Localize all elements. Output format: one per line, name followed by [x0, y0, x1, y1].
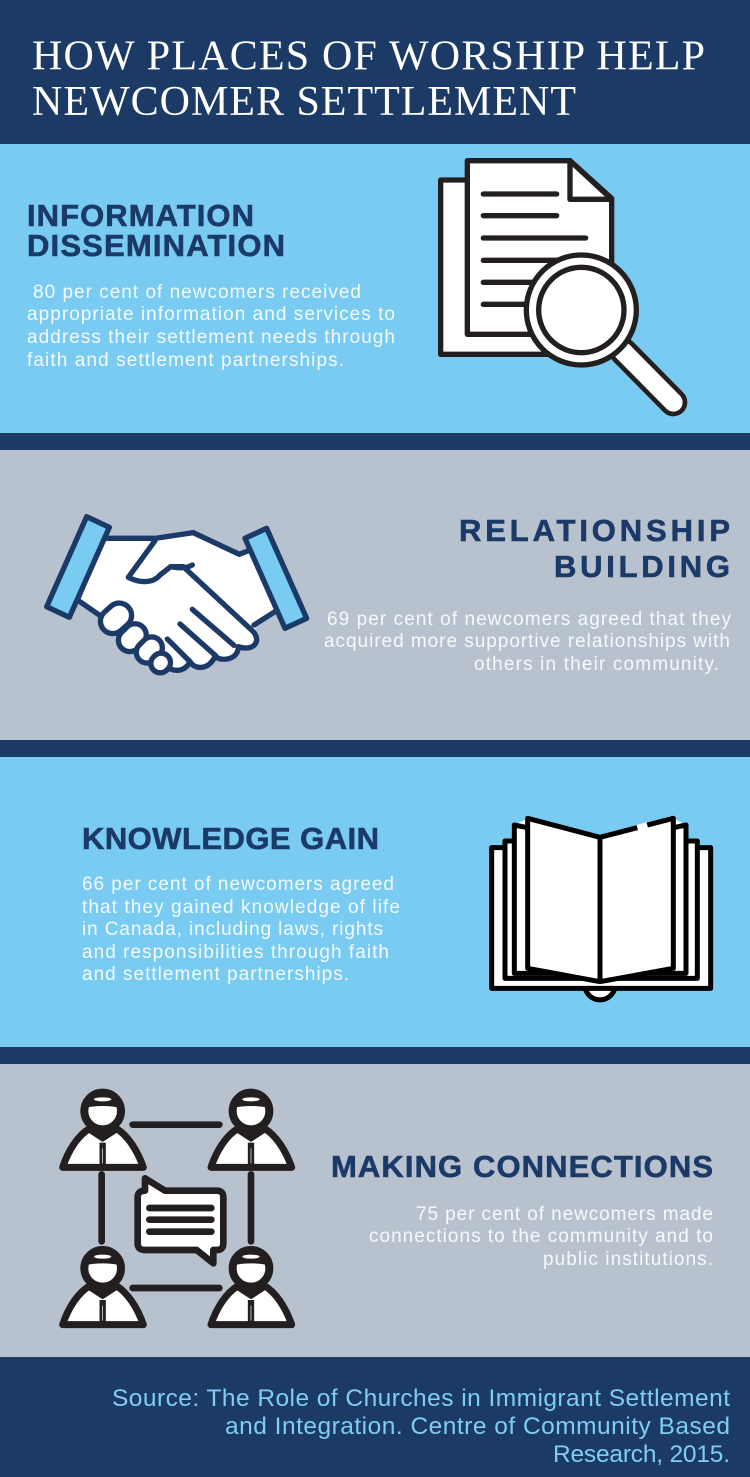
icon: connected people with speech bubble [63, 1093, 292, 1325]
text: source citation [112, 1385, 730, 1468]
text: source citation: and Integration. Centre of Community Based [225, 1413, 730, 1440]
text: relationship building: others in their community. [474, 654, 719, 675]
text: source citation: Research, 2015. [553, 1441, 730, 1468]
icon: open book [492, 818, 711, 1000]
panel: knowledge gain [0, 757, 750, 1047]
text: source citation: Source: The Role of Churches in Immigrant Settlement [112, 1385, 730, 1412]
heading: relationship building: RELATIONSHIP [459, 513, 730, 548]
text: making connections [369, 1204, 713, 1270]
heading: relationship building: BUILDING [554, 549, 730, 584]
heading: information dissemination: INFORMATION [27, 198, 254, 233]
text: information dissemination [27, 282, 395, 371]
icon: document with magnifying glass [441, 161, 673, 402]
text: relationship building: 69 per cent of newcomers agreed that they [327, 609, 732, 630]
heading: information dissemination [27, 198, 285, 263]
text: knowledge gain: and settlement partnerships. [82, 964, 349, 985]
text: making connections: connections to the community and to [369, 1226, 713, 1247]
heading: information dissemination: DISSEMINATION [27, 228, 285, 263]
text: knowledge gain: that they gained knowledge of life [82, 897, 400, 918]
heading: relationship building [459, 513, 730, 584]
text: information dissemination: appropriate information and services to [27, 304, 395, 325]
text: knowledge gain: 66 per cent of newcomers agreed [82, 874, 394, 895]
title [32, 34, 705, 125]
panel: relationship building [0, 450, 750, 740]
panel: source footer [0, 1357, 750, 1477]
heading: knowledge gain: KNOWLEDGE GAIN [82, 821, 379, 856]
text: information dissemination: faith and settlement partnerships. [27, 350, 344, 371]
text: relationship building: acquired more supportive relationships with [324, 631, 730, 652]
text: relationship building [324, 609, 732, 675]
text: knowledge gain: in Canada, including laws, rights [82, 919, 383, 940]
panel: information dissemination [0, 144, 750, 433]
panel: making connections [0, 1064, 750, 1357]
title: HOW PLACES OF WORSHIP HELP [32, 34, 705, 80]
title: NEWCOMER SETTLEMENT [32, 79, 576, 125]
heading: making connections: MAKING CONNECTIONS [331, 1149, 713, 1184]
text: making connections: public institutions. [543, 1249, 713, 1270]
text: knowledge gain [82, 874, 400, 985]
panel: title banner [0, 0, 750, 144]
icon: handshake [47, 517, 307, 677]
text: knowledge gain: and responsibilities through faith [82, 942, 389, 963]
text: information dissemination: address their settlement needs through [27, 327, 395, 348]
text: making connections: 75 per cent of newcomers made [416, 1204, 713, 1225]
text: information dissemination: 80 per cent of newcomers received [33, 282, 361, 303]
